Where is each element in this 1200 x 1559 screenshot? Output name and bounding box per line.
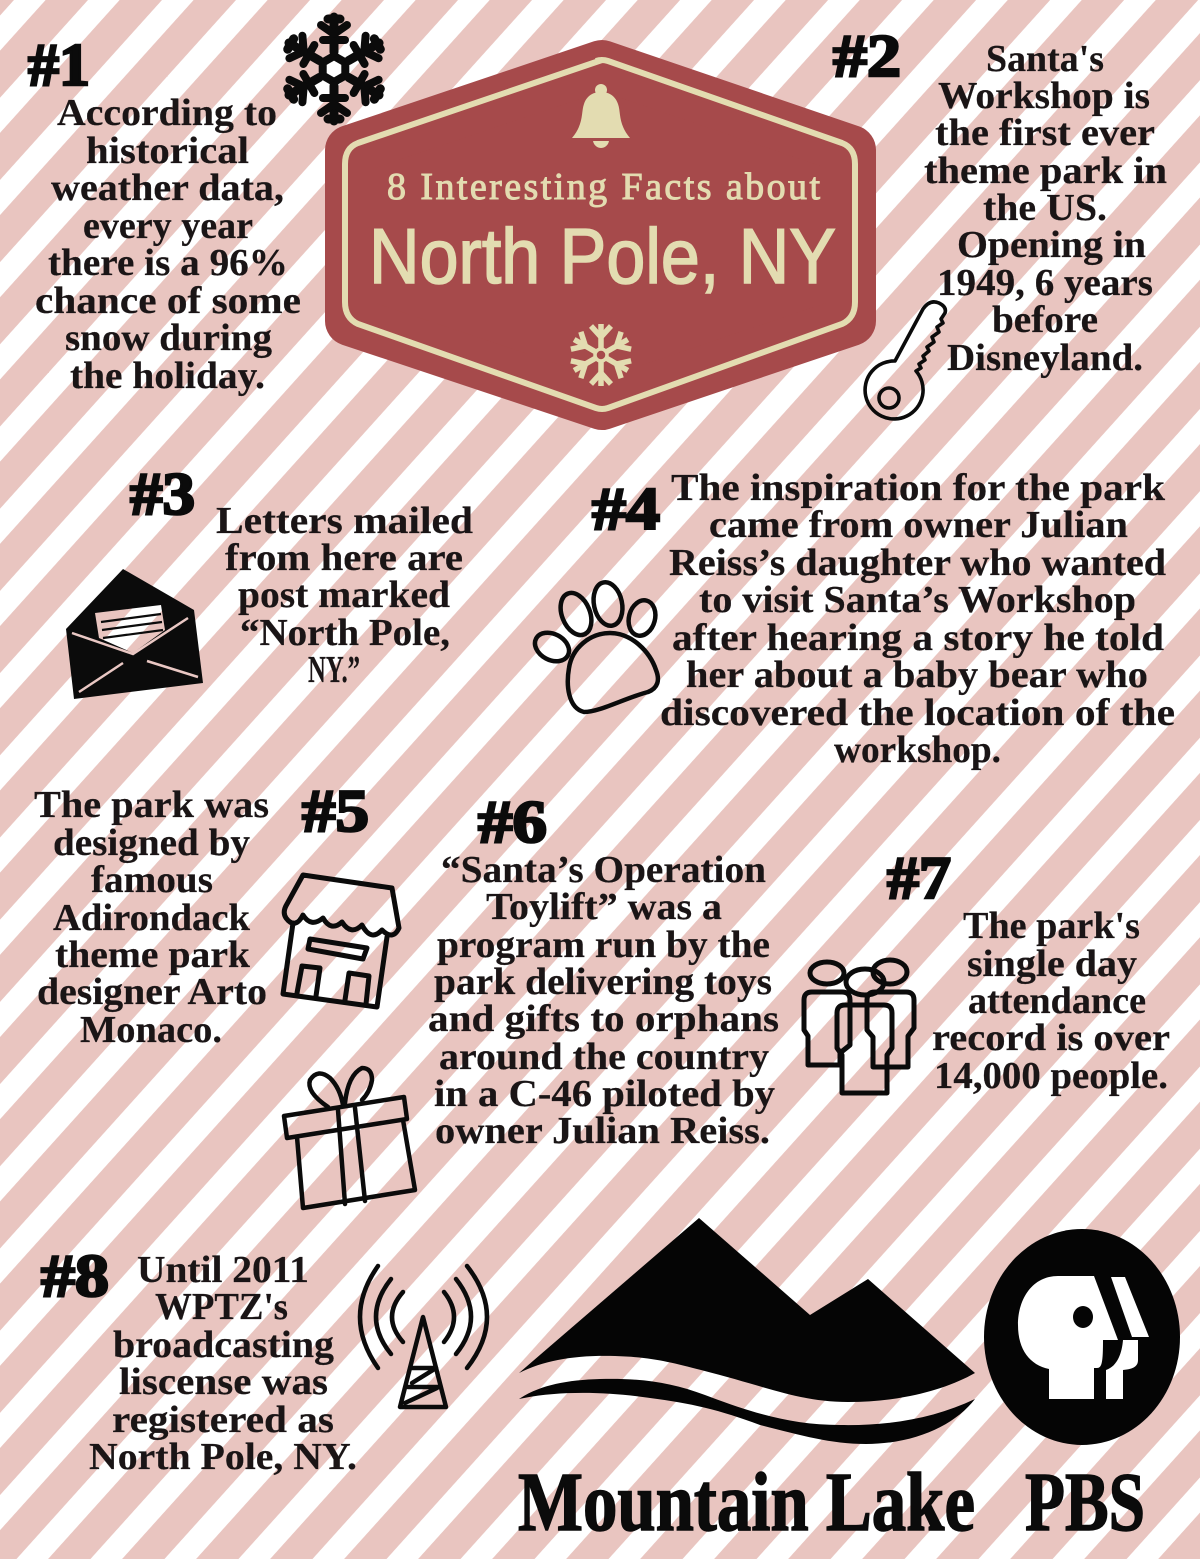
logo: PBS head — [1018, 1276, 1149, 1399]
fact 4 text — [660, 467, 1175, 771]
fact 1 text — [35, 92, 301, 397]
fact 2 text — [924, 38, 1167, 379]
fact 2 text: Santa's — [986, 38, 1104, 80]
number 7: #7 — [887, 845, 951, 911]
fact 3 text: from here are — [225, 537, 463, 579]
fact 8 text: broadcasting — [113, 1324, 334, 1366]
fact 6 text: owner Julian Reiss. — [435, 1110, 770, 1152]
logo: mountains — [519, 1218, 975, 1402]
fact 6 text: program run by the — [437, 924, 770, 966]
logo text: PBS: PBS — [1025, 1456, 1145, 1549]
fact 1 text: historical — [86, 130, 249, 172]
badge inner outline — [345, 60, 855, 409]
fact 2 text: theme park in — [924, 150, 1167, 192]
panel: fact 3 — [66, 461, 473, 699]
fact 2 text: Workshop is — [938, 75, 1150, 117]
icon: small snowflake — [569, 324, 633, 386]
fact 2 text: Disneyland. — [947, 337, 1143, 379]
icon: storefront — [283, 875, 399, 1007]
fact 4 text: The inspiration for the park — [671, 467, 1166, 509]
fact 3 text: NY.” — [308, 649, 360, 691]
fact 6 text: in a C-46 piloted by — [434, 1073, 775, 1115]
fact 8 text: Until 2011 — [137, 1249, 309, 1291]
number 5: #5 — [302, 778, 369, 844]
fact 7 text — [932, 905, 1170, 1097]
fact 3 text: Letters mailed — [216, 500, 473, 542]
fact 6 text: park delivering toys — [434, 961, 772, 1003]
fact 8 text: registered as — [112, 1399, 334, 1441]
panel: fact 6 — [284, 789, 779, 1208]
fact 2 text: 1949, 6 years — [937, 262, 1153, 304]
fact 1 text: there is a 96% — [48, 242, 288, 284]
fact 8 text: liscense was — [119, 1361, 328, 1403]
panel: fact 7 — [804, 845, 1170, 1097]
fact 6 text: “Santa’s Operation — [441, 849, 766, 891]
fact 6 text: around the country — [439, 1036, 769, 1078]
fact 1 text: the holiday. — [70, 355, 265, 397]
fact 5 text: theme park — [55, 934, 251, 976]
fact 1 text: weather data, — [51, 167, 284, 209]
number 2: #2 — [833, 23, 901, 89]
fact 7 text: single day — [967, 943, 1137, 985]
number 3: #3 — [130, 461, 195, 527]
fact 2 text: Opening in — [957, 224, 1146, 266]
logo: Mountain Lake PBS — [518, 1218, 1180, 1549]
fact 5 text: designer Arto — [37, 971, 267, 1013]
fact 8 text — [89, 1249, 357, 1478]
fact 6 text: and gifts to orphans — [428, 998, 779, 1040]
panel: fact 2 — [833, 23, 1167, 419]
fact 2 text: the US. — [983, 187, 1107, 229]
logo: lake wave — [519, 1379, 975, 1444]
fact 3 text: “North Pole, — [240, 612, 450, 654]
icon: radio tower — [360, 1266, 487, 1407]
fact 8 text: North Pole, NY. — [89, 1436, 357, 1478]
fact 5 text: The park was — [34, 784, 269, 826]
fact 5 text: designed by — [53, 822, 250, 864]
icon: people — [804, 960, 914, 1093]
icon: gift — [284, 1068, 415, 1208]
fact 8 text: WPTZ's — [155, 1286, 288, 1328]
icon: black snowflake — [282, 17, 386, 121]
fact 6 text — [428, 849, 779, 1152]
logo: PBS circle — [984, 1229, 1180, 1445]
logo text: Mountain Lake: Mountain Lake — [518, 1456, 975, 1549]
number 8: #8 — [41, 1243, 109, 1309]
fact 6 text: Toylift” was a — [486, 886, 722, 928]
panel: fact 1 — [28, 17, 386, 397]
fact 4 text: to visit Santa’s Workshop — [699, 579, 1136, 621]
fact 2 text: the first ever — [935, 112, 1155, 154]
icon: envelope — [66, 569, 203, 699]
fact 4 text: her about a baby bear who — [686, 654, 1148, 696]
number 1: #1 — [28, 32, 90, 98]
fact 5 text: Monaco. — [80, 1009, 222, 1051]
fact 4 text: after hearing a story he told — [672, 617, 1164, 659]
fact 3 text: post marked — [238, 574, 450, 616]
fact 1 text: snow during — [65, 317, 272, 359]
fact 4 text: Reiss’s daughter who wanted — [669, 542, 1166, 584]
panel: fact 4 — [530, 467, 1175, 771]
fact 5 text: famous — [91, 859, 213, 901]
fact 7 text: 14,000 people. — [934, 1055, 1168, 1097]
title badge — [345, 60, 855, 409]
fact 4 text: came from owner Julian — [709, 504, 1128, 546]
fact 1 text: chance of some — [35, 280, 301, 322]
number 4: #4 — [592, 476, 660, 542]
fact 1 text: every year — [83, 205, 253, 247]
icon: key — [865, 302, 945, 419]
fact 5 text — [34, 784, 269, 1051]
panel: fact 5 — [34, 778, 399, 1051]
fact 5 text: Adirondack — [53, 897, 251, 939]
number 6: #6 — [478, 789, 547, 855]
fact 7 text: record is over — [932, 1017, 1170, 1059]
icon: bell — [572, 84, 630, 148]
fact 7 text: attendance — [968, 980, 1146, 1022]
fact 7 text: The park's — [963, 905, 1140, 947]
fact 4 text: discovered the location of the — [660, 692, 1175, 734]
title line 1: 8 Interesting Facts about — [387, 166, 820, 208]
fact 1 text: According to — [57, 92, 277, 134]
panel: fact 8 — [41, 1243, 487, 1478]
fact 3 text — [216, 500, 473, 691]
fact 2 text: before — [992, 299, 1098, 341]
fact 4 text: workshop. — [834, 729, 1001, 771]
icon: paw — [530, 580, 659, 712]
title line 2: North Pole, NY — [369, 212, 836, 300]
